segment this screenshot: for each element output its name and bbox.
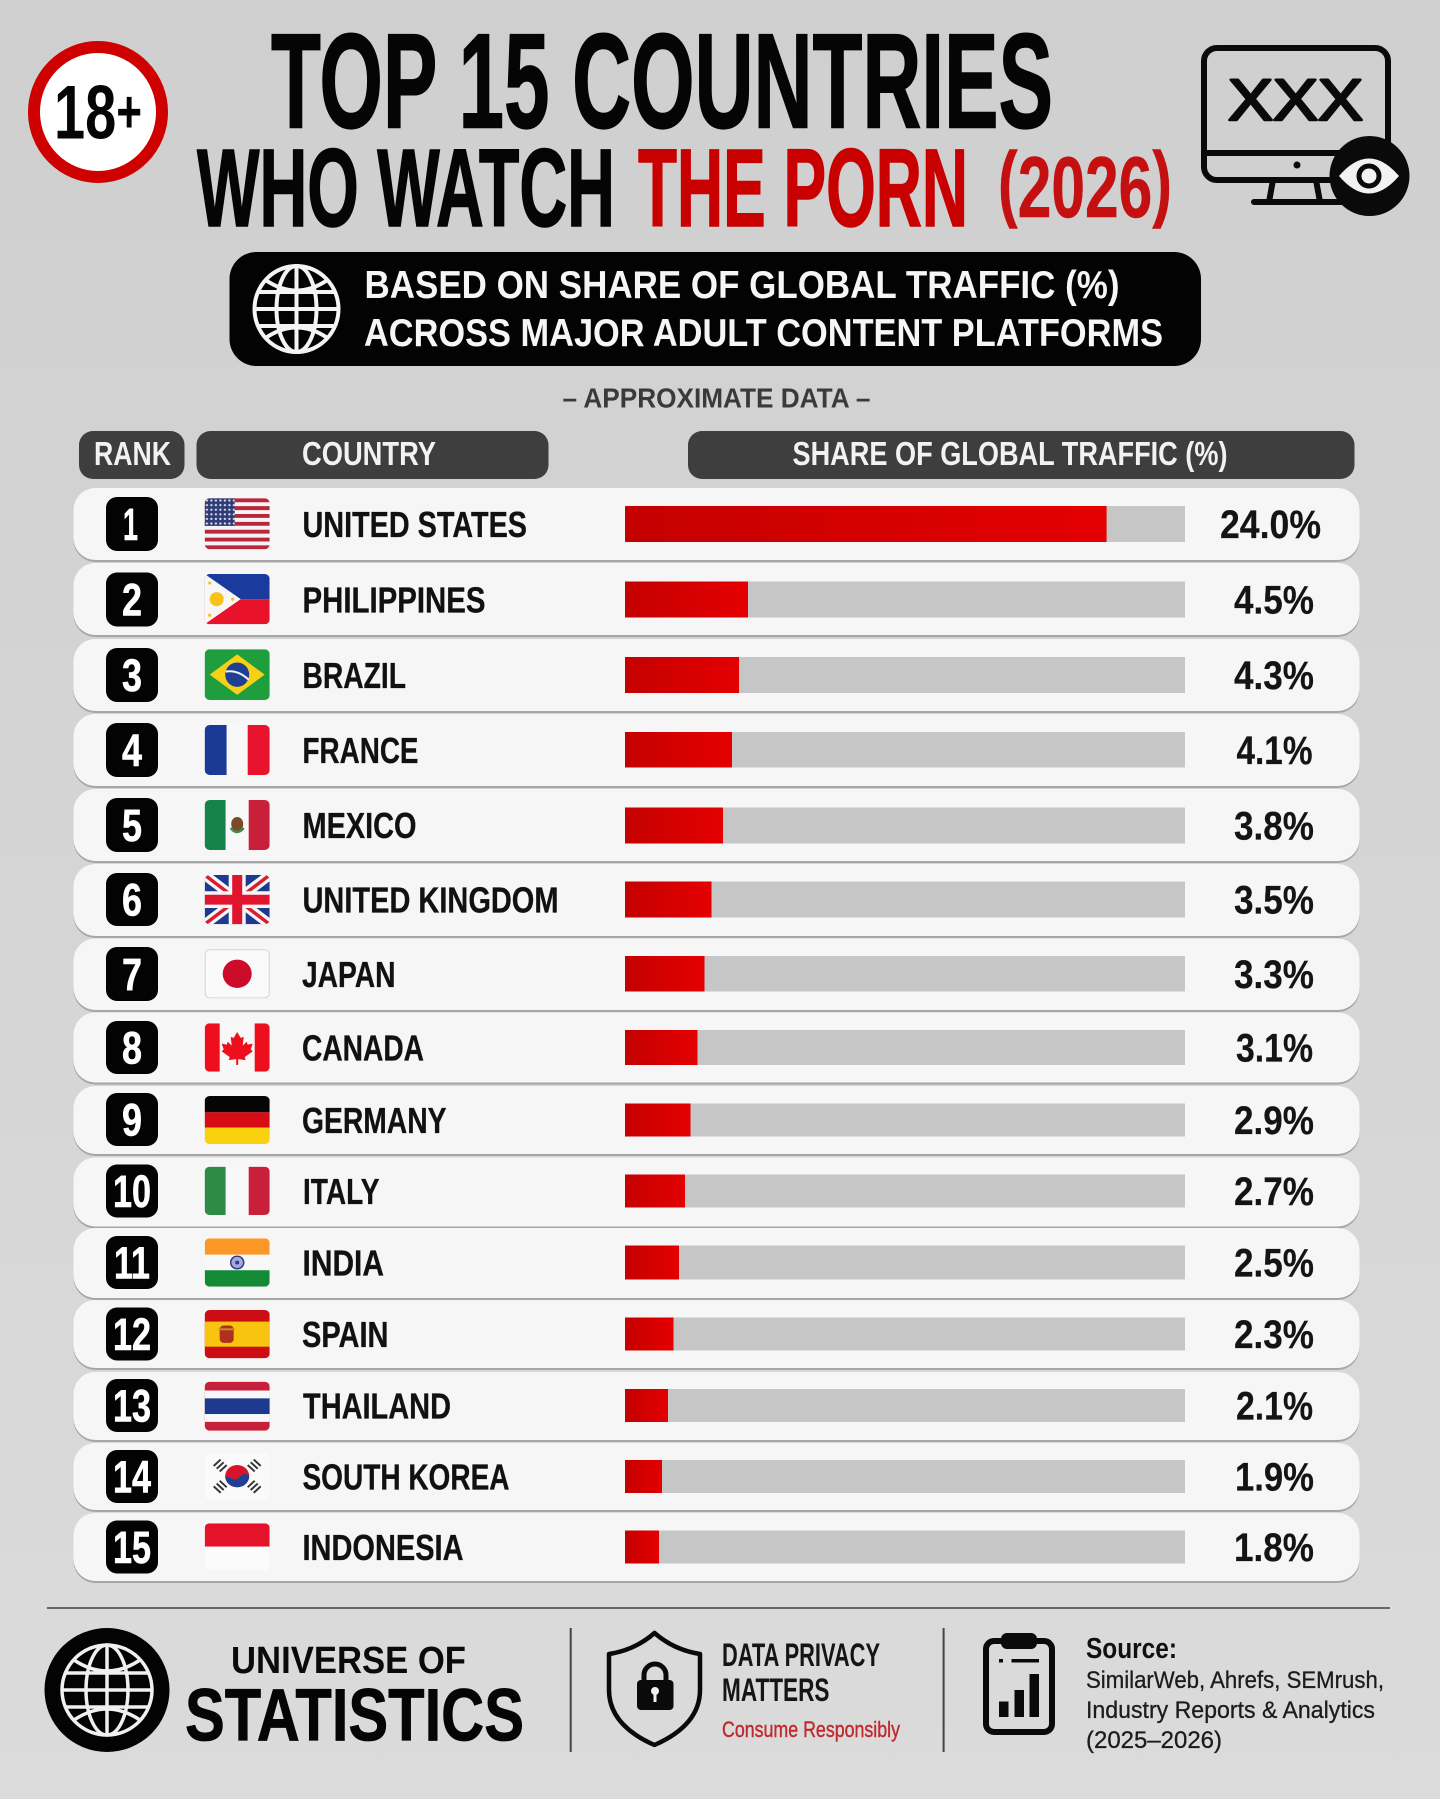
row 10: Italy: 10 — [113, 1166, 151, 1217]
row 7: Japan: 3.3% — [1234, 953, 1314, 997]
row 13: Thailand — [74, 1372, 1360, 1442]
icon: monitor with eye: XXX — [1228, 68, 1363, 133]
row 15: Indonesia — [74, 1513, 1360, 1583]
footer: data privacy: Consume Responsibly — [722, 1717, 900, 1742]
flag: Thailand — [204, 1382, 270, 1431]
row 14: South Korea: 1.9% — [1235, 1456, 1314, 1500]
flag: Mexico — [204, 800, 270, 850]
title: ) — [1152, 135, 1172, 229]
row 15: Indonesia: 1.8% — [1234, 1526, 1314, 1570]
icon: 18+ badge — [34, 47, 162, 177]
flag: South Korea — [213, 1458, 262, 1494]
icon: 18+ badge: 18 — [54, 70, 139, 156]
title: ( — [998, 135, 1018, 229]
table header: RANK — [94, 435, 171, 472]
row 1: United States: 1 — [123, 499, 138, 550]
flag: Germany — [204, 1096, 270, 1144]
row 2: Philippines: 2 — [122, 574, 142, 626]
footer: data privacy — [609, 1633, 900, 1745]
row 7: Japan: 7 — [122, 949, 142, 1000]
flag: Indonesia — [204, 1523, 270, 1547]
row 10: Italy: 2.7% — [1234, 1170, 1314, 1214]
row 10: Italy: ITALY — [303, 1171, 380, 1212]
footer: Universe of Statistics logo — [44, 1628, 524, 1756]
row 15: Indonesia: INDONESIA — [302, 1527, 464, 1568]
row 13: Thailand: 13 — [113, 1380, 151, 1432]
subtitle banner: ACROSS MAJOR ADULT CONTENT PLATFORMS — [364, 312, 1163, 355]
row 8: Canada — [74, 1012, 1360, 1084]
row 2: Philippines — [74, 563, 1360, 637]
table header — [79, 431, 1354, 479]
row 7: Japan — [74, 938, 1360, 1012]
row 1: United States: UNITED STATES — [302, 504, 527, 545]
row 12: Spain — [74, 1300, 1360, 1370]
title: WHO WATCH — [197, 127, 615, 250]
row 8: Canada: CANADA — [302, 1028, 424, 1068]
row 6: United Kingdom: 3.5% — [1234, 878, 1314, 922]
row 6: United Kingdom: 6 — [122, 874, 142, 926]
row 6: United Kingdom: UNITED KINGDOM — [302, 880, 558, 920]
footer: Universe of Statistics logo: UNIVERSE OF — [231, 1640, 466, 1682]
flag: Italy — [204, 1166, 270, 1215]
row 9: Germany — [74, 1086, 1360, 1156]
flag: France — [204, 725, 270, 775]
footer: source — [986, 1633, 1384, 1754]
footer: source: (2025–2026) — [1086, 1727, 1222, 1754]
icon: shield with lock — [609, 1633, 700, 1745]
footer: source: SimilarWeb, Ahrefs, SEMrush, — [1086, 1667, 1384, 1694]
row 6: United Kingdom — [74, 864, 1360, 938]
row 15: Indonesia: 15 — [113, 1522, 151, 1573]
icon: globe logo — [44, 1628, 170, 1752]
row 5: Mexico: 5 — [122, 800, 142, 851]
subtitle banner: BASED ON SHARE OF GLOBAL TRAFFIC (%) — [364, 264, 1120, 307]
row 14: South Korea — [74, 1443, 1360, 1512]
icon: clipboard chart — [986, 1633, 1052, 1732]
row 3: Brazil — [74, 639, 1360, 713]
row 2: Philippines: 4.5% — [1234, 578, 1314, 622]
row 3: Brazil: 4.3% — [1234, 654, 1314, 698]
row 4: France: 4.1% — [1236, 729, 1312, 773]
flag: United Kingdom — [204, 875, 270, 924]
flag: Japan — [204, 949, 270, 998]
footer: data privacy: DATA PRIVACY — [722, 1637, 880, 1673]
row 5: Mexico: MEXICO — [302, 805, 416, 846]
row 5: Mexico — [74, 789, 1360, 863]
flag: Brazil — [204, 649, 270, 700]
row 9: Germany: 2.9% — [1234, 1099, 1314, 1143]
row 8: Canada: 3.1% — [1236, 1026, 1313, 1070]
flag: Philippines — [204, 574, 270, 624]
row 3: Brazil: BRAZIL — [302, 655, 406, 696]
row 12: Spain: SPAIN — [302, 1314, 388, 1355]
row 14: South Korea: SOUTH KOREA — [302, 1456, 510, 1498]
row 12: Spain: 12 — [113, 1309, 151, 1360]
row 11: India: 11 — [114, 1238, 150, 1288]
row 4: France — [74, 714, 1360, 788]
row 3: Brazil: 3 — [122, 650, 142, 701]
row 4: France: FRANCE — [302, 730, 418, 771]
row 12: Spain: 2.3% — [1234, 1313, 1314, 1357]
table header: SHARE OF GLOBAL TRAFFIC (%) — [792, 435, 1228, 472]
title — [197, 6, 1172, 250]
footer: Universe of Statistics logo: STATISTICS — [185, 1674, 524, 1756]
row 2: Philippines: PHILIPPINES — [302, 580, 486, 620]
footer: source: Industry Reports & Analytics — [1086, 1697, 1375, 1724]
flag: Spain — [204, 1310, 270, 1358]
icon: globe — [254, 266, 338, 352]
flag: United States — [204, 498, 270, 550]
row 9: Germany: 9 — [122, 1094, 142, 1146]
icon: monitor with eye — [1204, 48, 1410, 216]
row 11: India: INDIA — [302, 1242, 384, 1284]
row 11: India: 2.5% — [1234, 1242, 1314, 1286]
row 1: United States — [74, 488, 1360, 562]
table header: COUNTRY — [302, 435, 436, 472]
icon: 18+ badge: + — [116, 78, 142, 146]
subtitle banner — [230, 252, 1201, 366]
row 5: Mexico: 3.8% — [1234, 804, 1314, 848]
row 1: United States: 24.0% — [1220, 503, 1321, 547]
footer: data privacy: MATTERS — [722, 1672, 830, 1708]
row 7: Japan: JAPAN — [302, 954, 396, 995]
row 11: India — [74, 1228, 1360, 1300]
row 14: South Korea: 14 — [113, 1452, 151, 1502]
note: approximate data: – APPROXIMATE DATA – — [562, 382, 870, 414]
row 13: Thailand: 2.1% — [1236, 1384, 1313, 1428]
title: 2026 — [1018, 140, 1152, 236]
flag: India — [204, 1238, 270, 1287]
title: THE PORN — [638, 127, 968, 250]
row 10: Italy — [74, 1158, 1360, 1228]
row 4: France: 4 — [122, 725, 142, 776]
row 9: Germany: GERMANY — [302, 1100, 446, 1141]
row 8: Canada: 8 — [122, 1022, 142, 1074]
row 13: Thailand: THAILAND — [303, 1386, 451, 1426]
flag: Canada — [204, 1023, 270, 1072]
footer: source: Source: — [1086, 1633, 1177, 1665]
